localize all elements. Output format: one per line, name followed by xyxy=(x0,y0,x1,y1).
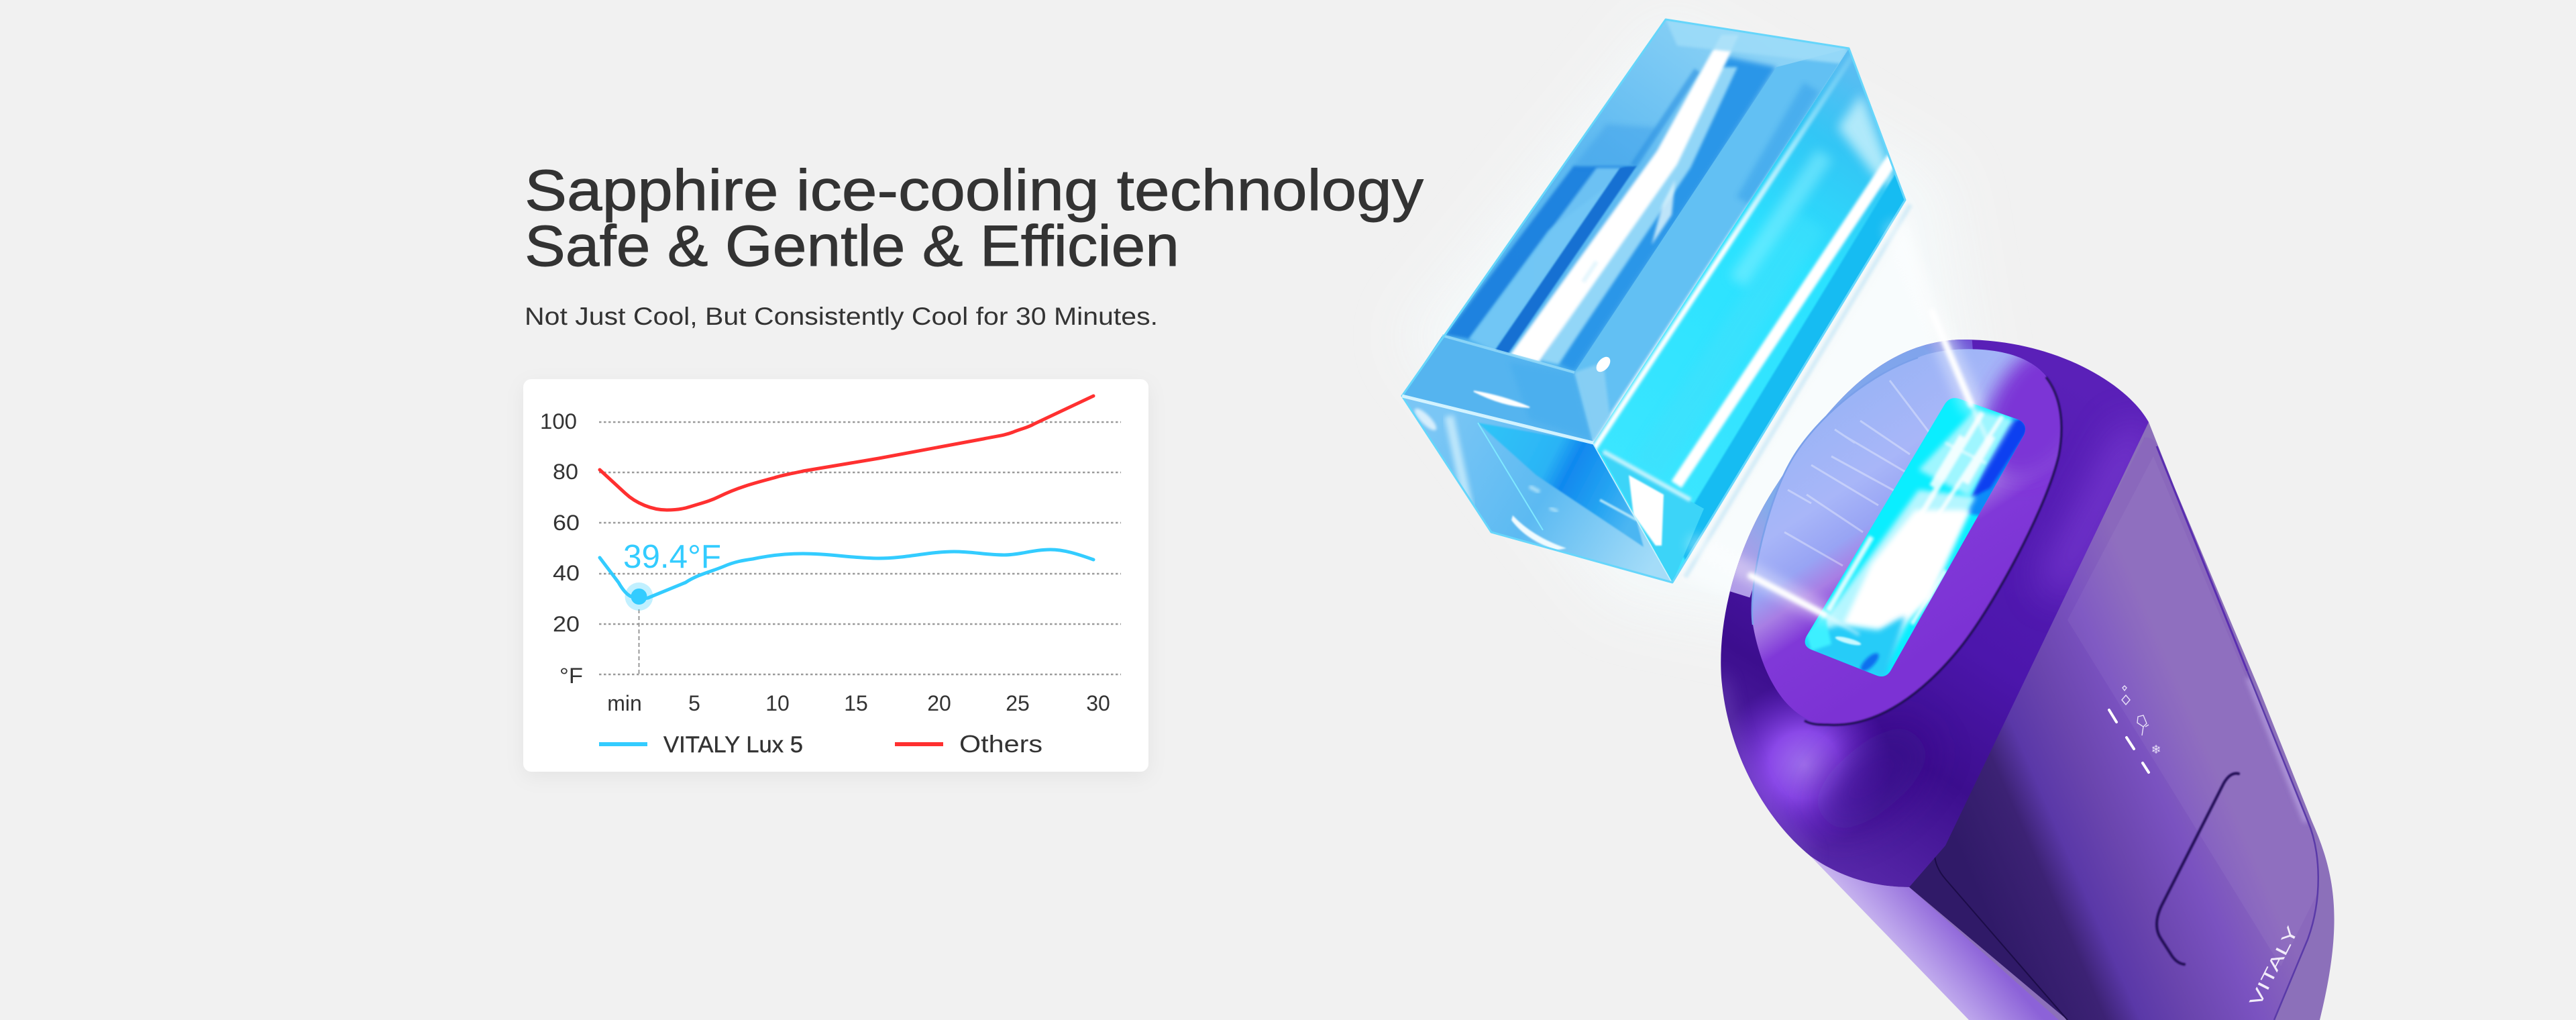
device body xyxy=(1909,422,2334,1020)
device darker lower body xyxy=(1909,438,2214,1020)
chart grid lines xyxy=(599,422,1121,674)
x axis labels: 10 xyxy=(765,691,790,715)
y axis labels: °F xyxy=(559,664,583,688)
min marker dot xyxy=(625,582,653,611)
line: VITALY Lux 5 (blue) xyxy=(600,550,1093,599)
light glow behind crystal xyxy=(1402,13,1986,644)
x axis labels: 20 xyxy=(927,691,951,715)
x axis labels xyxy=(607,691,1110,715)
y axis labels: 80 xyxy=(553,460,578,484)
device mode icons: ❄ xyxy=(2151,743,2161,756)
y axis labels: 100 xyxy=(540,409,577,434)
device power button xyxy=(2157,774,2239,964)
crystal left face xyxy=(1445,20,1848,443)
title xyxy=(525,158,1424,278)
light beams xyxy=(1697,232,1989,634)
device indicator dashes xyxy=(2109,710,2149,772)
crystal right face xyxy=(1593,47,1907,582)
x axis labels: 30 xyxy=(1086,691,1110,715)
device head xyxy=(1721,340,2149,887)
crystal edges xyxy=(1402,19,1911,582)
panel: temperature chart card xyxy=(523,379,1148,772)
x axis labels: 5 xyxy=(688,691,700,715)
y axis labels: 60 xyxy=(553,511,580,535)
y axis labels xyxy=(540,409,583,688)
title: Safe & Gentle & Efficien xyxy=(525,214,1179,278)
device cooling window xyxy=(1805,398,2033,679)
legend: VITALY Lux 5: VITALY Lux 5 xyxy=(663,732,803,758)
y axis labels: 20 xyxy=(553,612,580,636)
line: others (red) xyxy=(600,396,1093,510)
min value label: 39.4°F xyxy=(623,539,721,575)
legend: VITALY Lux 5 xyxy=(599,732,803,758)
legend: Others xyxy=(895,730,1042,758)
sapphire crystal xyxy=(1402,19,1911,582)
plate light rays xyxy=(1784,380,1939,566)
min marker drop line xyxy=(639,609,640,674)
x axis labels: min xyxy=(607,691,642,715)
device lower lilac section xyxy=(1811,856,2068,1020)
subtitle: Not Just Cool, But Consistently Cool for 30 Minutes. xyxy=(525,303,1158,330)
x axis labels: 25 xyxy=(1006,691,1030,715)
crystal bottom face xyxy=(1402,396,1672,582)
legend: Others: Others xyxy=(959,730,1042,758)
title: Sapphire ice-cooling technology xyxy=(525,158,1424,223)
y axis labels: 40 xyxy=(553,561,580,585)
x axis labels: 15 xyxy=(844,691,868,715)
device mode icons xyxy=(2122,686,2161,756)
crystal front band xyxy=(1402,336,1613,443)
device panel outline xyxy=(1935,829,2068,1020)
device edge lines xyxy=(2157,446,2318,1020)
device brand text: VITALY xyxy=(2246,923,2302,1009)
device side panel xyxy=(1978,438,2308,1020)
device: IPL handset xyxy=(1704,322,2334,1020)
device front plate xyxy=(1751,349,2063,727)
